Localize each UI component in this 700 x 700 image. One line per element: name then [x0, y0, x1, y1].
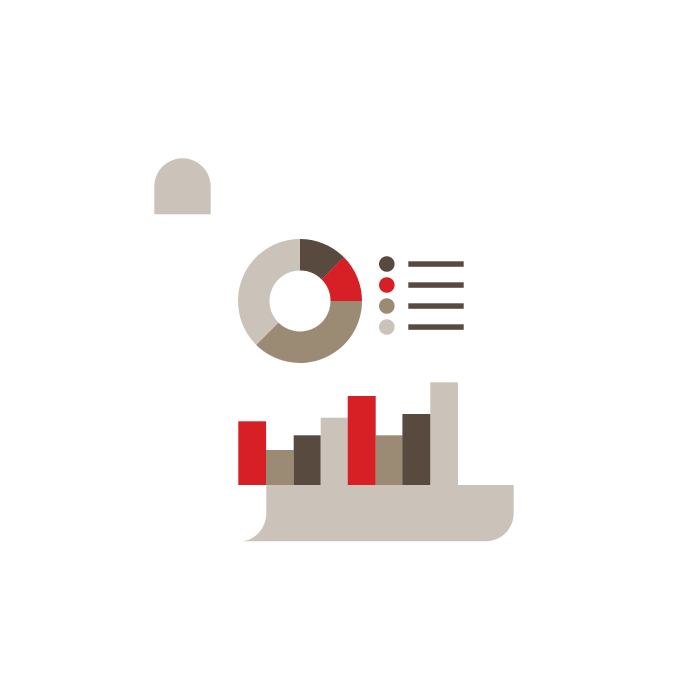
icon: arch shape — [154, 158, 211, 214]
bar 8: light beige — [430, 382, 458, 485]
legend dot: dark brown — [379, 256, 395, 272]
bar 7: dark brown — [402, 414, 430, 485]
bar 1: red — [238, 421, 266, 485]
bar 2: tan — [266, 450, 294, 485]
legend line 4 — [408, 324, 464, 330]
chart legend — [379, 256, 464, 335]
legend dot: light beige — [379, 319, 395, 335]
legend line 1 — [408, 261, 464, 267]
legend dot: tan — [379, 298, 395, 314]
bar 6: tan — [376, 435, 402, 485]
bar 5: red — [348, 396, 376, 485]
bar 4: light beige — [321, 418, 348, 485]
donut segment: red — [322, 257, 362, 301]
bar chart — [238, 382, 458, 485]
donut segment: light beige — [238, 239, 300, 345]
base shape under bar chart — [240, 485, 514, 541]
donut segment: tan — [256, 301, 362, 363]
bar 3: dark brown — [294, 435, 321, 485]
legend line 3 — [408, 303, 464, 309]
legend dot: red — [379, 277, 395, 293]
donut chart — [238, 239, 362, 363]
donut segment: dark brown — [300, 239, 344, 279]
legend line 2 — [408, 282, 464, 288]
